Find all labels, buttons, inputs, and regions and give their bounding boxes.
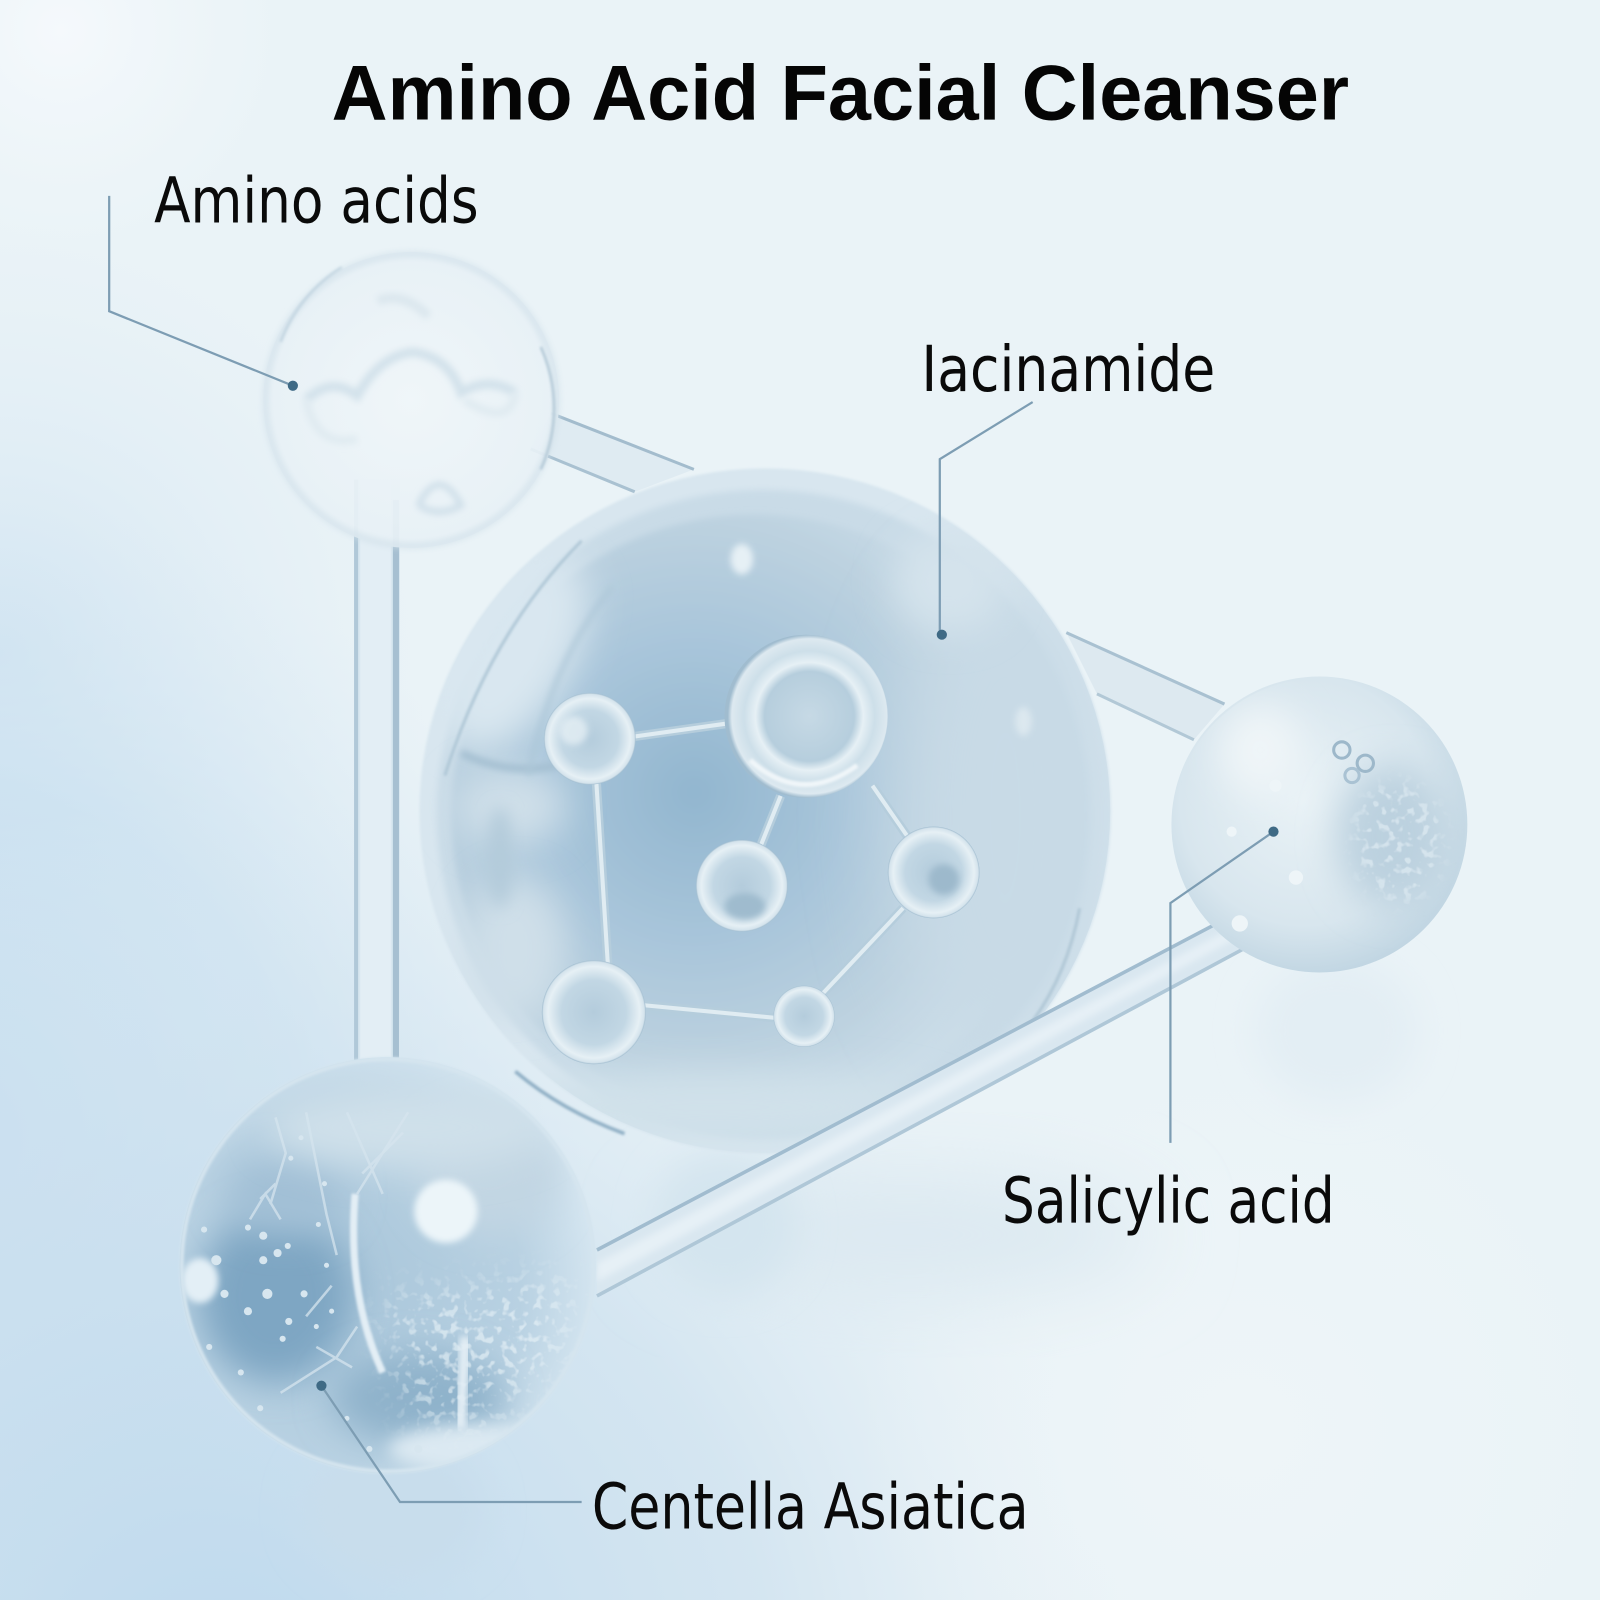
- molecule bonds: [596, 722, 911, 1018]
- rod: amino acids to iacinamide: [531, 413, 694, 492]
- grainy texture: [375, 1270, 570, 1430]
- branching fibres: [249, 1112, 386, 1394]
- label: iacinamide callout: Iacinamide: [921, 332, 1215, 406]
- rod: iacinamide to salicylic acid: [1066, 633, 1224, 740]
- molecule atoms: [542, 635, 980, 1064]
- speckles: [201, 1136, 372, 1452]
- rod: centella to salicylic acid: [597, 898, 1278, 1296]
- label: centella asiatica callout: [316, 1381, 1029, 1544]
- molecule inside iacinamide sphere: [542, 635, 980, 1064]
- sphere: iacinamide: [413, 468, 1117, 1154]
- bright light spot: [414, 1180, 478, 1243]
- label: centella asiatica callout: Centella Asiatica: [592, 1470, 1029, 1544]
- sphere: amino acids: [263, 252, 559, 548]
- sphere: salicylic acid: [1171, 677, 1467, 972]
- label: amino acids callout: Amino acids: [154, 163, 479, 237]
- sphere: centella asiatica: [180, 1057, 596, 1473]
- label: salicylic acid callout: Salicylic acid: [1002, 1163, 1335, 1237]
- dark patch in sphere: [199, 1209, 352, 1383]
- label: salicylic acid callout: [1002, 827, 1335, 1237]
- rod: amino acids to centella: [354, 480, 400, 1061]
- label: amino acids callout: [109, 163, 479, 391]
- title: Amino Acid Facial Cleanser: [332, 50, 1349, 136]
- label: iacinamide callout: [921, 332, 1215, 640]
